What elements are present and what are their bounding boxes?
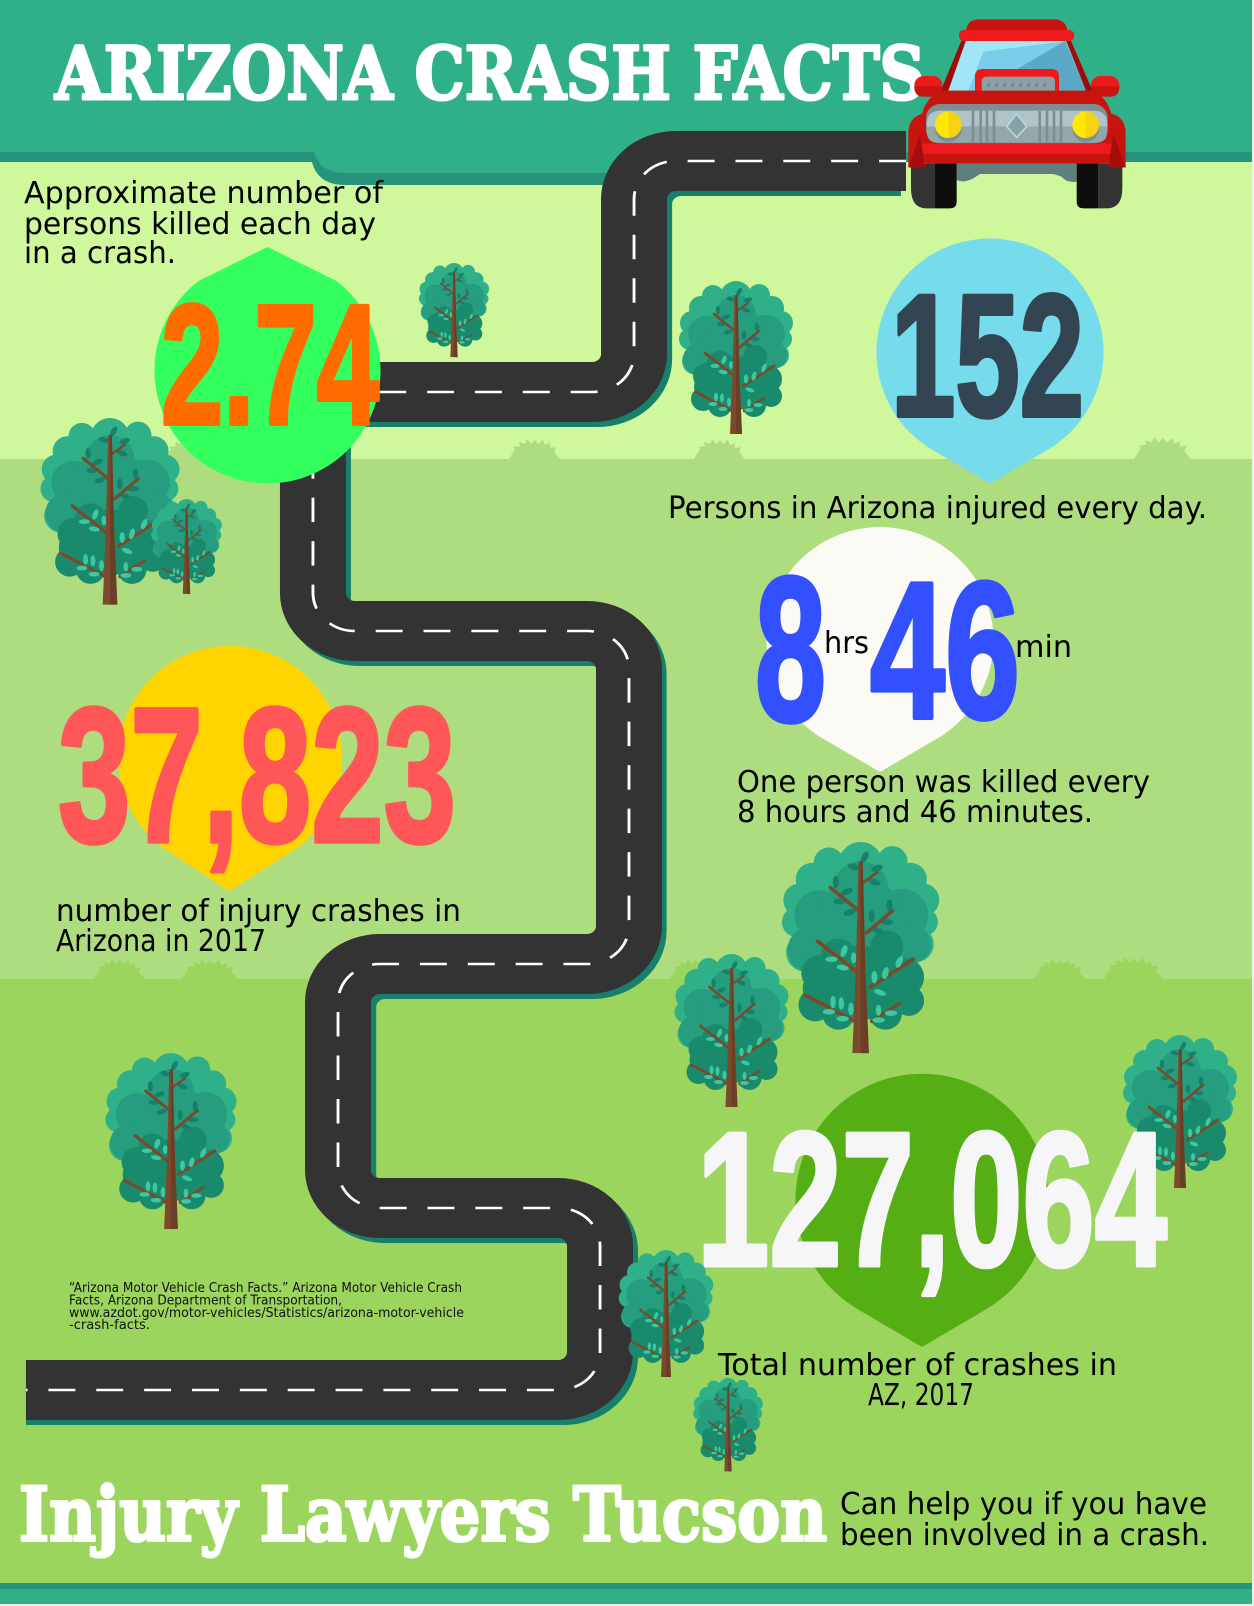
tree: medium centre right	[674, 954, 788, 1107]
background: lower field	[0, 979, 1252, 1584]
caption: total crashes: Total number of crashes in	[717, 1348, 1117, 1383]
icon: red car	[908, 19, 1126, 208]
panel: injury crashes	[56, 646, 461, 959]
caption: injury crashes: Arizona in 2017	[56, 924, 266, 959]
panel: persons killed each day	[24, 176, 384, 483]
pin: blue	[877, 239, 1104, 484]
footer tagline	[840, 1487, 1209, 1553]
grass tufts lower	[94, 957, 1163, 979]
caption: injured every day: Persons in Arizona injured every day.	[668, 491, 1207, 526]
background: middle field	[0, 459, 1252, 979]
car headlights	[935, 111, 1099, 142]
tree: small left	[151, 499, 222, 594]
header banner	[0, 0, 1252, 185]
tree: small top centre	[419, 263, 489, 357]
background: light field	[0, 0, 1252, 459]
grass tufts upper	[165, 437, 1191, 459]
tree: beside lower road	[619, 1250, 713, 1377]
caption: injury crashes: number of injury crashes in	[56, 894, 461, 929]
footer tagline: Can help you if you have	[840, 1487, 1207, 1522]
citation: www.azdot.gov/motor-vehicles/Statistics/arizona-motor-vehicle	[69, 1306, 464, 1321]
number: 152: 152	[891, 258, 1084, 453]
number: 2.74: 2.74	[161, 270, 379, 461]
citation: “Arizona Motor Vehicle Crash Facts.” Arizona Motor Vehicle Crash	[69, 1281, 462, 1296]
citation: Facts, Arizona Department of Transportation,	[69, 1294, 342, 1308]
car hood	[920, 91, 1113, 147]
tree: small bottom	[693, 1378, 763, 1471]
pin: white	[766, 527, 993, 772]
title: ARIZONA CRASH FACTS	[54, 31, 925, 117]
tree: large left	[40, 418, 180, 605]
footer brand: Injury Lawyers Tucson	[19, 1470, 827, 1558]
footer band	[0, 1583, 1252, 1604]
tree: large centre right	[782, 842, 939, 1053]
car scoop	[975, 69, 1059, 93]
car shadow	[957, 163, 1077, 182]
car fenders	[908, 113, 1126, 167]
car grille	[926, 104, 1108, 143]
pin: yellow	[118, 646, 342, 891]
panel: injured every day	[668, 239, 1207, 526]
caption: one person killed: One person was killed every	[737, 765, 1150, 800]
caption: killed each day	[24, 176, 384, 271]
caption: total crashes: AZ, 2017	[868, 1378, 974, 1413]
car wheels	[911, 163, 1122, 208]
panel: total crashes	[697, 1074, 1167, 1413]
caption: killed each day: Approximate number of	[24, 176, 384, 211]
number: 37,823: 37,823	[58, 668, 456, 882]
caption: total crashes	[717, 1348, 1117, 1413]
footer tagline: been involved in a crash.	[840, 1518, 1209, 1553]
number: 8: 8	[755, 534, 826, 764]
tree: far right	[1123, 1035, 1237, 1188]
tree: beside road	[679, 281, 793, 434]
caption: injury crashes	[56, 894, 461, 959]
caption: one person killed: 8 hours and 46 minutes.	[737, 795, 1093, 830]
label: hrs: hrs	[824, 626, 869, 661]
number: 46: 46	[870, 542, 1020, 760]
caption: killed each day: in a crash.	[24, 236, 176, 271]
pin: dark green	[796, 1074, 1048, 1347]
car roof rack	[959, 19, 1074, 41]
caption: one person killed	[737, 765, 1150, 830]
car mirrors	[914, 76, 1119, 97]
label: min: min	[1015, 630, 1072, 665]
citation	[69, 1281, 464, 1333]
car bumper	[908, 133, 1126, 167]
citation: -crash-facts.	[69, 1318, 150, 1333]
panel: killed every 8 hours 46 minutes	[737, 527, 1150, 830]
caption: killed each day: persons killed each day	[24, 207, 376, 242]
tree: lower left	[105, 1053, 237, 1229]
winding road	[26, 161, 906, 1395]
car windshield	[940, 40, 1093, 93]
pin: green	[154, 247, 381, 483]
